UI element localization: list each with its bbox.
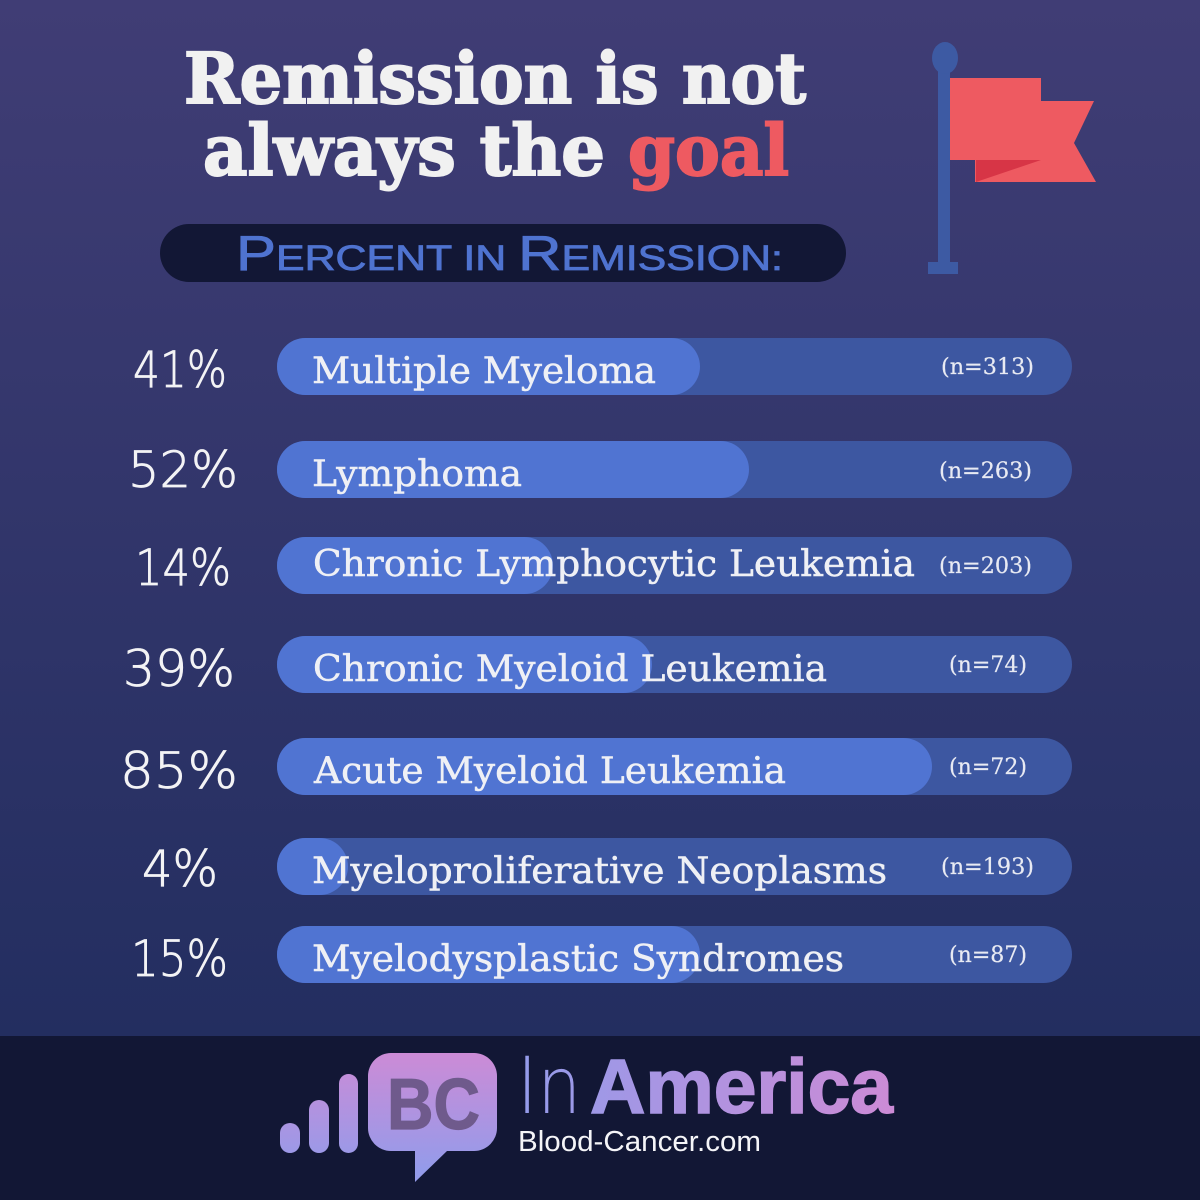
row: Myelodysplastic Syndromes: Myelodysplastic Syndromes	[312, 939, 844, 980]
row: Myeloproliferative Neoplasms: 4%	[142, 840, 218, 898]
subtitle pill	[160, 224, 846, 282]
row: Chronic Lymphocytic Leukemia	[135, 537, 1072, 597]
row: Acute Myeloid Leukemia: 85%	[120, 742, 238, 800]
title: Remission is not	[184, 37, 806, 120]
row: Chronic Lymphocytic Leukemia: 14%	[135, 539, 231, 597]
row: Chronic Lymphocytic Leukemia: Chronic Lymphocytic Leukemia	[313, 544, 915, 585]
row: Multiple Myeloma: (n=313)	[941, 355, 1034, 380]
row: Chronic Myeloid Leukemia: (n=74)	[949, 653, 1027, 678]
icon: signal bars	[280, 1074, 358, 1153]
row: Chronic Lymphocytic Leukemia: (n=203)	[939, 554, 1032, 579]
row: Myeloproliferative Neoplasms: (n=193)	[941, 855, 1034, 880]
row: Chronic Myeloid Leukemia: 39%	[123, 640, 235, 698]
logo: BC speech bubble	[368, 1053, 497, 1182]
title: goal	[628, 109, 789, 192]
logo wordmark: InAmerica: America	[590, 1044, 894, 1130]
title: always the	[203, 109, 605, 192]
row: Lymphoma: (n=263)	[939, 459, 1032, 484]
row: Myelodysplastic Syndromes: (n=87)	[949, 943, 1027, 968]
row: Multiple Myeloma: 41%	[133, 341, 227, 399]
footer band	[0, 1036, 1200, 1200]
logo: BC speech bubble: BC	[387, 1065, 480, 1145]
row: Chronic Myeloid Leukemia	[123, 636, 1072, 698]
logo url: Blood-Cancer.com	[518, 1126, 761, 1158]
row: Acute Myeloid Leukemia: Acute Myeloid Leukemia	[313, 751, 786, 792]
row: Acute Myeloid Leukemia: (n=72)	[949, 755, 1027, 780]
row: Multiple Myeloma	[133, 338, 1072, 399]
row: Myelodysplastic Syndromes	[131, 926, 1072, 988]
row: Lymphoma: Lymphoma	[312, 454, 522, 495]
row: Acute Myeloid Leukemia	[120, 738, 1072, 800]
subtitle pill: PERCENT IN REMISSION:	[236, 227, 783, 281]
row: Chronic Myeloid Leukemia: Chronic Myeloid Leukemia	[313, 649, 827, 690]
row: Myeloproliferative Neoplasms: Myeloproliferative Neoplasms	[312, 851, 887, 892]
row: Lymphoma: 52%	[128, 441, 238, 499]
row: Myelodysplastic Syndromes: 15%	[131, 930, 228, 988]
title	[184, 37, 806, 192]
row: Myeloproliferative Neoplasms	[142, 838, 1072, 898]
row: Lymphoma	[128, 441, 1072, 499]
row: Multiple Myeloma: Multiple Myeloma	[312, 351, 656, 392]
logo wordmark: InAmerica: In	[517, 1042, 581, 1132]
icon: flag	[928, 42, 1096, 274]
